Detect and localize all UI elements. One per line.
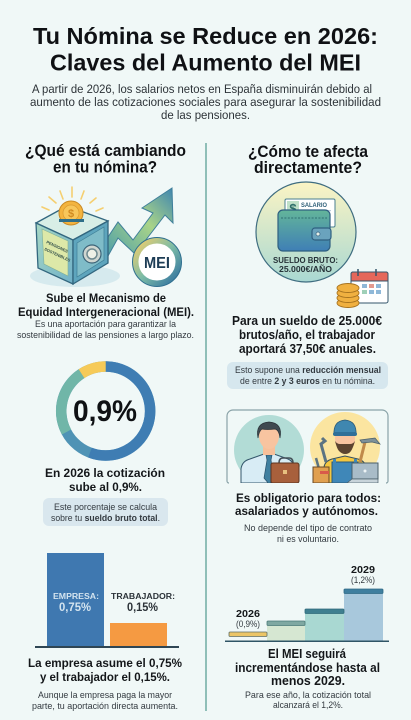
icon: pension safe with rising arrow and MEI badge: $ xyxy=(68,208,74,220)
text: company and worker shares: Aunque la empresa paga la mayor xyxy=(38,690,172,700)
donut chart: 0,9% xyxy=(61,366,150,456)
text: mandatory for everyone: asalariados y autónomos. xyxy=(235,504,378,518)
heading: how it affects you xyxy=(248,142,368,177)
step chart: MEI growth 2026 to 2029: (0,9%) xyxy=(236,619,260,630)
text: company and worker shares: La empresa asume el 0,75% xyxy=(28,656,182,670)
illustration: employee and self-employed worker xyxy=(227,410,388,485)
intro text xyxy=(30,82,381,122)
bar chart: company vs worker: EMPRESA: xyxy=(53,591,99,601)
heading: what is changing: en tu nómina? xyxy=(53,158,157,176)
icon: wallet with gross salary xyxy=(256,182,356,282)
bar chart: company vs worker: TRABAJADOR: xyxy=(111,591,175,601)
icon: pension safe with rising arrow and MEI badge: SOSTENIBLES xyxy=(44,246,72,263)
text: MEI keeps increasing: menos 2029. xyxy=(271,673,345,688)
text: company and worker shares: parte, tu aportación directa aumenta. xyxy=(32,701,178,711)
intro text: de las pensiones. xyxy=(161,108,250,122)
callout: gross salary xyxy=(43,498,168,526)
heading: how it affects you: directamente? xyxy=(254,158,362,177)
text: mandatory for everyone: Es obligatorio para todos: xyxy=(236,491,381,505)
text: MEI keeps increasing: incrementándose hasta al xyxy=(235,660,380,675)
heading: how it affects you: ¿Cómo te afecta xyxy=(248,142,368,161)
step chart: MEI growth 2026 to 2029: (1,2%) xyxy=(351,575,375,586)
callout: monthly reduction xyxy=(227,362,388,389)
intro text: aumento de las cotizaciones sociales para asegurar la sostenibilidad xyxy=(30,95,381,109)
panel: left column xyxy=(17,141,194,711)
text: MEI keeps increasing: Para ese año, la cotización total xyxy=(245,690,371,700)
text: mechanism explained: Sube el Mecanismo de xyxy=(46,291,166,305)
text: MEI keeps increasing: El MEI seguirá xyxy=(268,646,347,661)
text: mechanism explained: Equidad Intergeneracional (MEI). xyxy=(18,305,194,319)
text: salary example: Para un sueldo de 25.000€ xyxy=(232,313,382,328)
text: mechanism explained: sostenibilidad de las pensiones a largo plazo. xyxy=(17,330,194,340)
title: Claves del Aumento del MEI xyxy=(50,50,361,76)
text: mechanism explained: Es una aportación para garantizar la xyxy=(35,319,177,329)
text: mandatory for everyone xyxy=(235,491,381,544)
icon: wallet with gross salary: $ xyxy=(289,201,297,216)
text: mechanism explained xyxy=(17,291,194,340)
panel: right column xyxy=(225,142,389,710)
text: salary example xyxy=(232,313,382,356)
text: company and worker shares: y el trabajador el 0,15%. xyxy=(40,670,170,684)
callout: gross salary: Este porcentaje se calcula xyxy=(54,502,158,512)
text: mandatory for everyone: ni es voluntario. xyxy=(277,534,339,544)
title xyxy=(33,23,378,76)
callout: monthly reduction: Esto supone una reducción mensual xyxy=(235,365,381,375)
text: MEI keeps increasing xyxy=(235,646,380,710)
bar chart: company vs worker: 0,15% xyxy=(127,602,158,614)
icon: pension safe with rising arrow and MEI badge: PENSIONES xyxy=(46,239,69,254)
icon: pension safe with rising arrow and MEI badge xyxy=(30,187,182,287)
icon: wallet with gross salary: SUELDO BRUTO: xyxy=(273,255,338,265)
text: mandatory for everyone: No depende del tipo de contrato xyxy=(244,523,372,533)
icon: calendar and coins xyxy=(337,269,388,308)
bar chart: company vs worker xyxy=(35,553,179,648)
intro text: A partir de 2026, los salarios netos en España disminuirán debido al xyxy=(32,82,372,96)
icon: wallet with gross salary: SALARIO xyxy=(301,203,327,209)
text: contribution rises xyxy=(45,466,165,494)
title: Tu Nómina se Reduce en 2026: xyxy=(33,23,378,49)
donut chart: 0,9%: 0,9% xyxy=(73,395,137,428)
text: contribution rises: En 2026 la cotización xyxy=(45,466,165,480)
callout: monthly reduction: de entre 2 y 3 euros en tu nómina. xyxy=(240,376,375,386)
text: salary example: aportará 37,50€ anuales. xyxy=(239,341,376,356)
text: company and worker shares xyxy=(28,656,182,711)
icon: wallet with gross salary: 25.000€/AÑO xyxy=(279,264,332,274)
bar chart: company vs worker: 0,75% xyxy=(59,602,91,614)
heading: what is changing: ¿Qué está cambiando xyxy=(25,141,186,160)
heading: what is changing xyxy=(25,141,186,176)
text: MEI keeps increasing: alcanzará el 1,2%. xyxy=(273,700,343,710)
step chart: MEI growth 2026 to 2029: 2029 xyxy=(351,564,375,576)
callout: gross salary: sobre tu sueldo bruto total. xyxy=(51,513,160,523)
icon: pension safe with rising arrow and MEI badge: MEI xyxy=(144,255,170,272)
text: contribution rises: sube al 0,9%. xyxy=(69,480,142,494)
text: salary example: brutos/año, el trabajador xyxy=(239,327,375,342)
step chart: MEI growth 2026 to 2029: 2026 xyxy=(236,608,260,620)
step chart: MEI growth 2026 to 2029 xyxy=(225,564,389,642)
